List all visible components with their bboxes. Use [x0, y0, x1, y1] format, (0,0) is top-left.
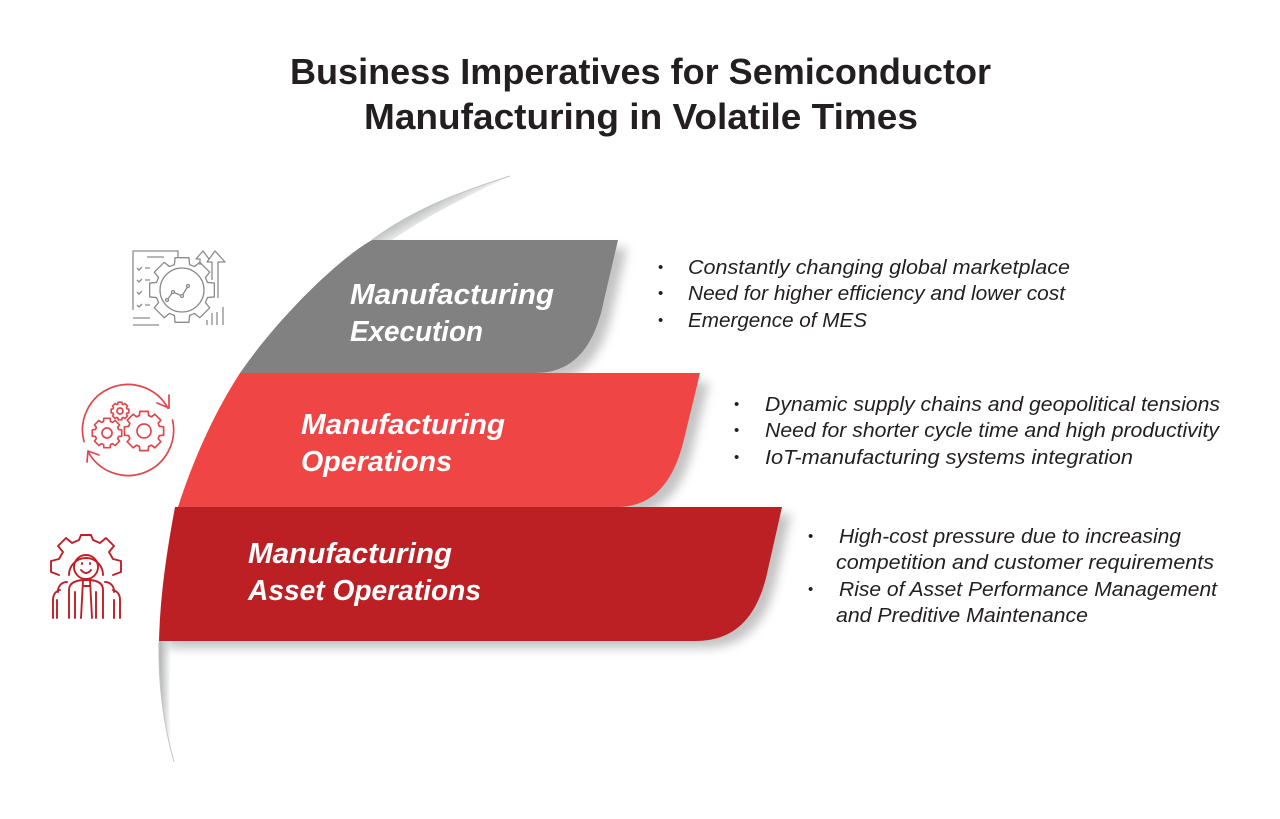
text block: execution bullets: •: [658, 312, 663, 329]
panel: manufacturing operations: Operations: [301, 446, 452, 478]
panel: manufacturing execution: Execution: [350, 316, 483, 348]
panel: manufacturing asset operations: Asset Operations: [247, 575, 481, 607]
text block: operations bullets: [734, 394, 1220, 469]
crescent backdrop: top: [372, 176, 510, 240]
icon: gear with checklist and growth arrows: [133, 251, 225, 325]
panel: manufacturing operations: [178, 373, 709, 515]
title: Business Imperatives for Semiconductor: [290, 51, 991, 92]
text block: operations bullets: •: [734, 449, 739, 466]
text block: execution bullets: •: [658, 285, 663, 302]
text block: asset operations bullets: •: [808, 581, 813, 598]
icon: gears in circular arrows: [82, 384, 174, 476]
title: [290, 51, 991, 137]
text block: execution bullets: Emergence of MES: [688, 310, 868, 332]
text block: asset operations bullets: Rise of Asset Performance Management: [839, 579, 1219, 601]
text block: execution bullets: Constantly changing global marketplace: [688, 257, 1070, 279]
text block: asset operations bullets: competition and customer requirements: [836, 552, 1214, 574]
text block: asset operations bullets: and Preditive Maintenance: [836, 605, 1088, 627]
panel: manufacturing asset operations: Manufacturing: [248, 538, 452, 570]
panel: manufacturing execution: Manufacturing: [350, 279, 554, 311]
text block: operations bullets: IoT-manufacturing systems integration: [765, 447, 1133, 469]
text block: asset operations bullets: [808, 526, 1219, 627]
text block: asset operations bullets: High-cost pressure due to increasing: [839, 526, 1181, 548]
text block: execution bullets: Need for higher efficiency and lower cost: [688, 283, 1066, 305]
icon: person in front of gear with team: [51, 535, 121, 618]
text block: execution bullets: [658, 257, 1070, 332]
panel: manufacturing asset operations: [159, 507, 791, 648]
text block: asset operations bullets: •: [808, 528, 813, 545]
panel: manufacturing execution: [240, 240, 627, 381]
panel: manufacturing operations: Manufacturing: [301, 409, 505, 441]
text block: execution bullets: •: [658, 259, 663, 276]
text block: operations bullets: Need for shorter cycle time and high productivity: [765, 420, 1220, 442]
text block: operations bullets: •: [734, 422, 739, 439]
crescent backdrop: bottom: [159, 641, 174, 762]
text block: operations bullets: Dynamic supply chains and geopolitical tensions: [765, 394, 1220, 416]
title: Manufacturing in Volatile Times: [364, 96, 918, 137]
text block: operations bullets: •: [734, 396, 739, 413]
